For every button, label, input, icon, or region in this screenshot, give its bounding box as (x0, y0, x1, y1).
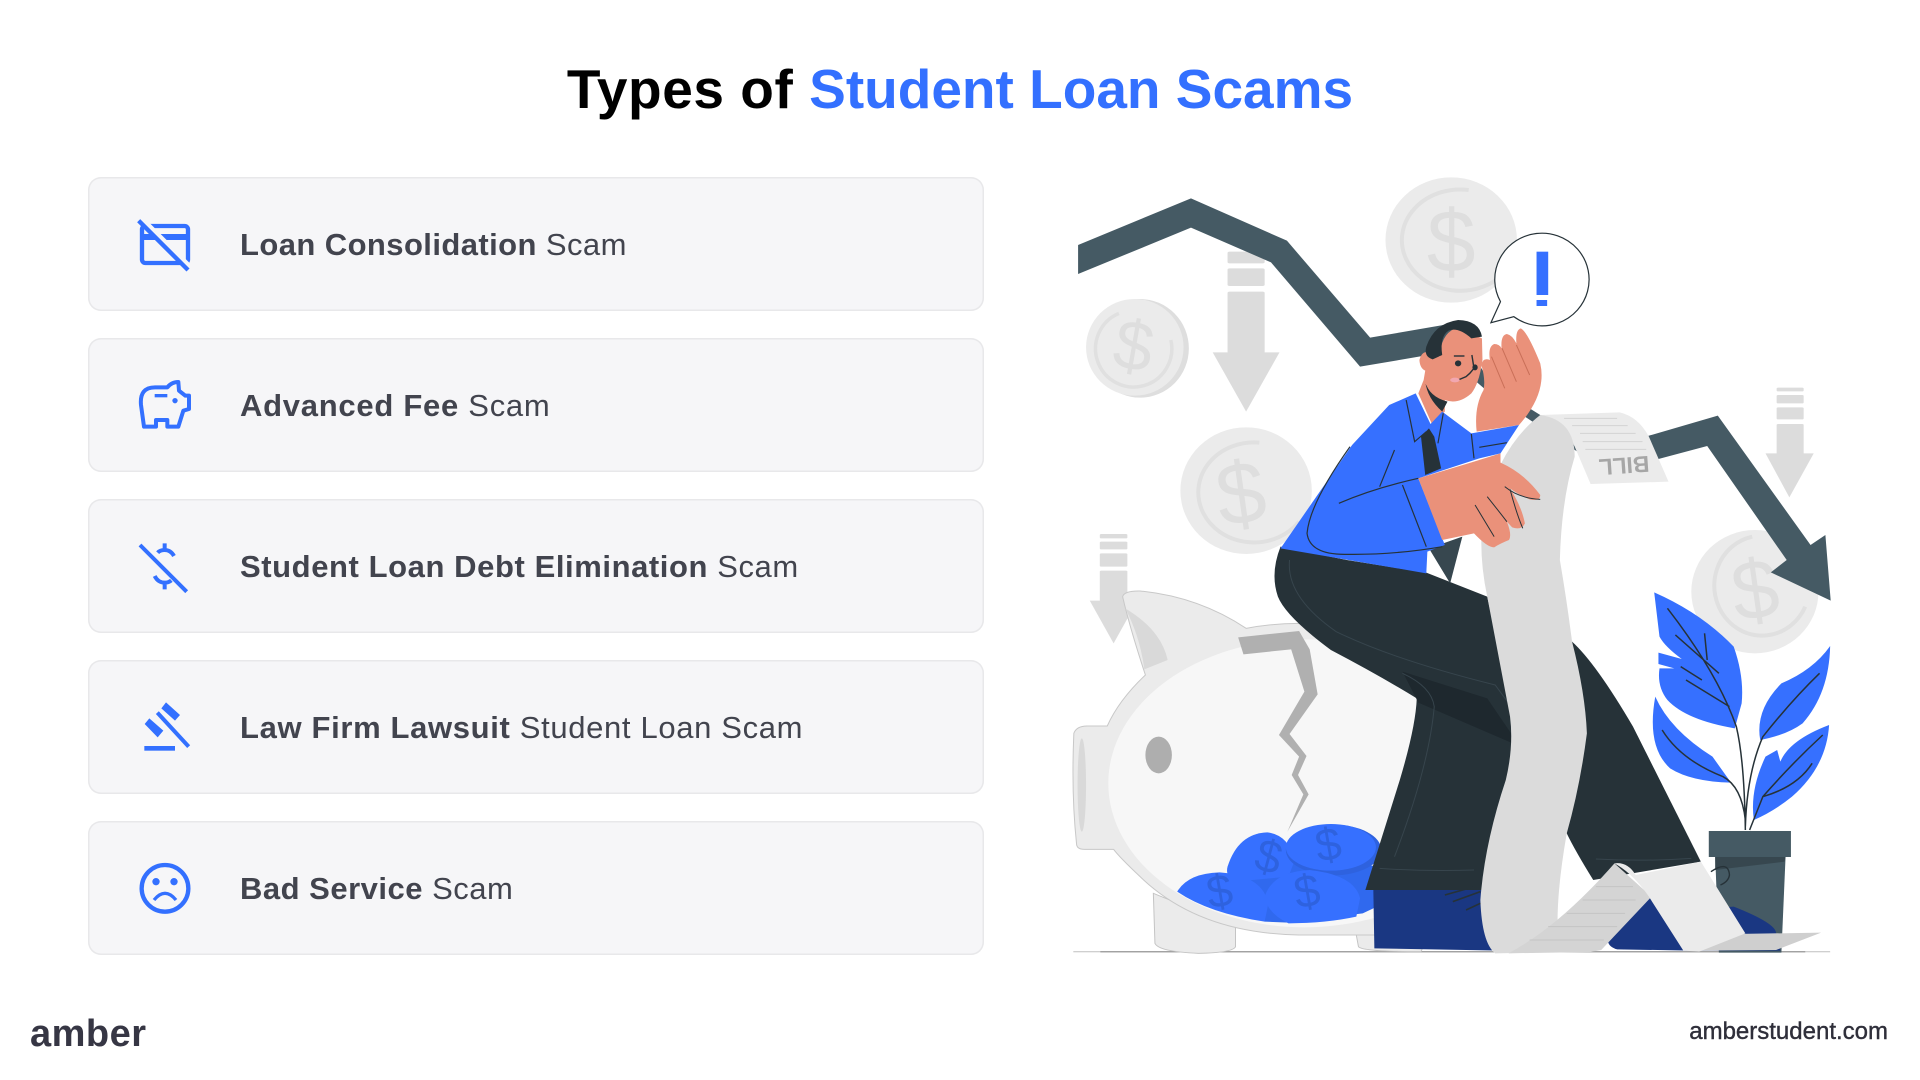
panel: advanced fee scam (88, 338, 984, 472)
lower tie (1429, 537, 1462, 583)
shoes (1373, 888, 1780, 951)
coin: center (1180, 427, 1312, 554)
icon: crossed card (137, 219, 190, 272)
receipt: top paper with bill text: BILL (1598, 451, 1650, 480)
panel: loan consolidation scam (88, 177, 984, 311)
blue coins: $ (1250, 828, 1288, 885)
shirt (1281, 393, 1519, 573)
coin: right: $ (1726, 540, 1785, 639)
coin: left: $ (1108, 304, 1159, 388)
man head (1418, 320, 1530, 423)
icon: crossed dollar (138, 543, 188, 594)
blue coins (1177, 816, 1384, 923)
label: Bad Service Scam (240, 871, 513, 906)
website url: amberstudent.com (1689, 1018, 1888, 1045)
blue coins: $ (1202, 863, 1236, 919)
trousers (1274, 547, 1701, 890)
chart arrow: falling trend (1078, 198, 1831, 601)
receipt: long strip (1445, 415, 1821, 953)
piggy bank (1073, 591, 1506, 953)
blue coins: $ (1311, 816, 1345, 872)
raised hand (1476, 328, 1542, 432)
pig legs (1153, 893, 1432, 953)
pig crack (1238, 631, 1318, 832)
ground line (1073, 951, 1830, 952)
coin: center: $ (1210, 441, 1272, 546)
pig body (1073, 591, 1506, 935)
panel: bad service scam (88, 821, 984, 955)
title: Types of Student Loan Scams (567, 58, 1353, 120)
lower hand and forearm (1418, 453, 1540, 547)
pot (1709, 831, 1791, 953)
lower hand outlines (1475, 487, 1540, 537)
speech bubble with exclamation mark (1491, 233, 1589, 326)
arrow: grey lower left (1090, 534, 1137, 643)
panel: student loan debt elimination scam (88, 499, 984, 633)
coin: top: $ (1427, 192, 1476, 291)
blue coins: $ (1290, 863, 1324, 919)
icon: sad face (140, 862, 190, 914)
logo: amber: amber (30, 1013, 147, 1055)
receipt: top paper with bill text (1540, 412, 1669, 484)
label: Law Firm Lawsuit Student Loan Scam (240, 710, 803, 745)
arrow: grey right (1766, 388, 1814, 497)
label: Loan Consolidation Scam (240, 227, 627, 262)
coin: top (1385, 177, 1517, 303)
plant (1653, 592, 1830, 830)
arrow: grey left (1213, 252, 1279, 412)
coin: left (1086, 299, 1189, 398)
panel: law firm lawsuit student loan scam (88, 660, 984, 794)
coin: right (1691, 530, 1818, 653)
icon: piggy bank (138, 380, 191, 429)
label: Student Loan Debt Elimination Scam (240, 549, 799, 584)
label: Advanced Fee Scam (240, 388, 550, 423)
icon: gavel (144, 702, 190, 751)
